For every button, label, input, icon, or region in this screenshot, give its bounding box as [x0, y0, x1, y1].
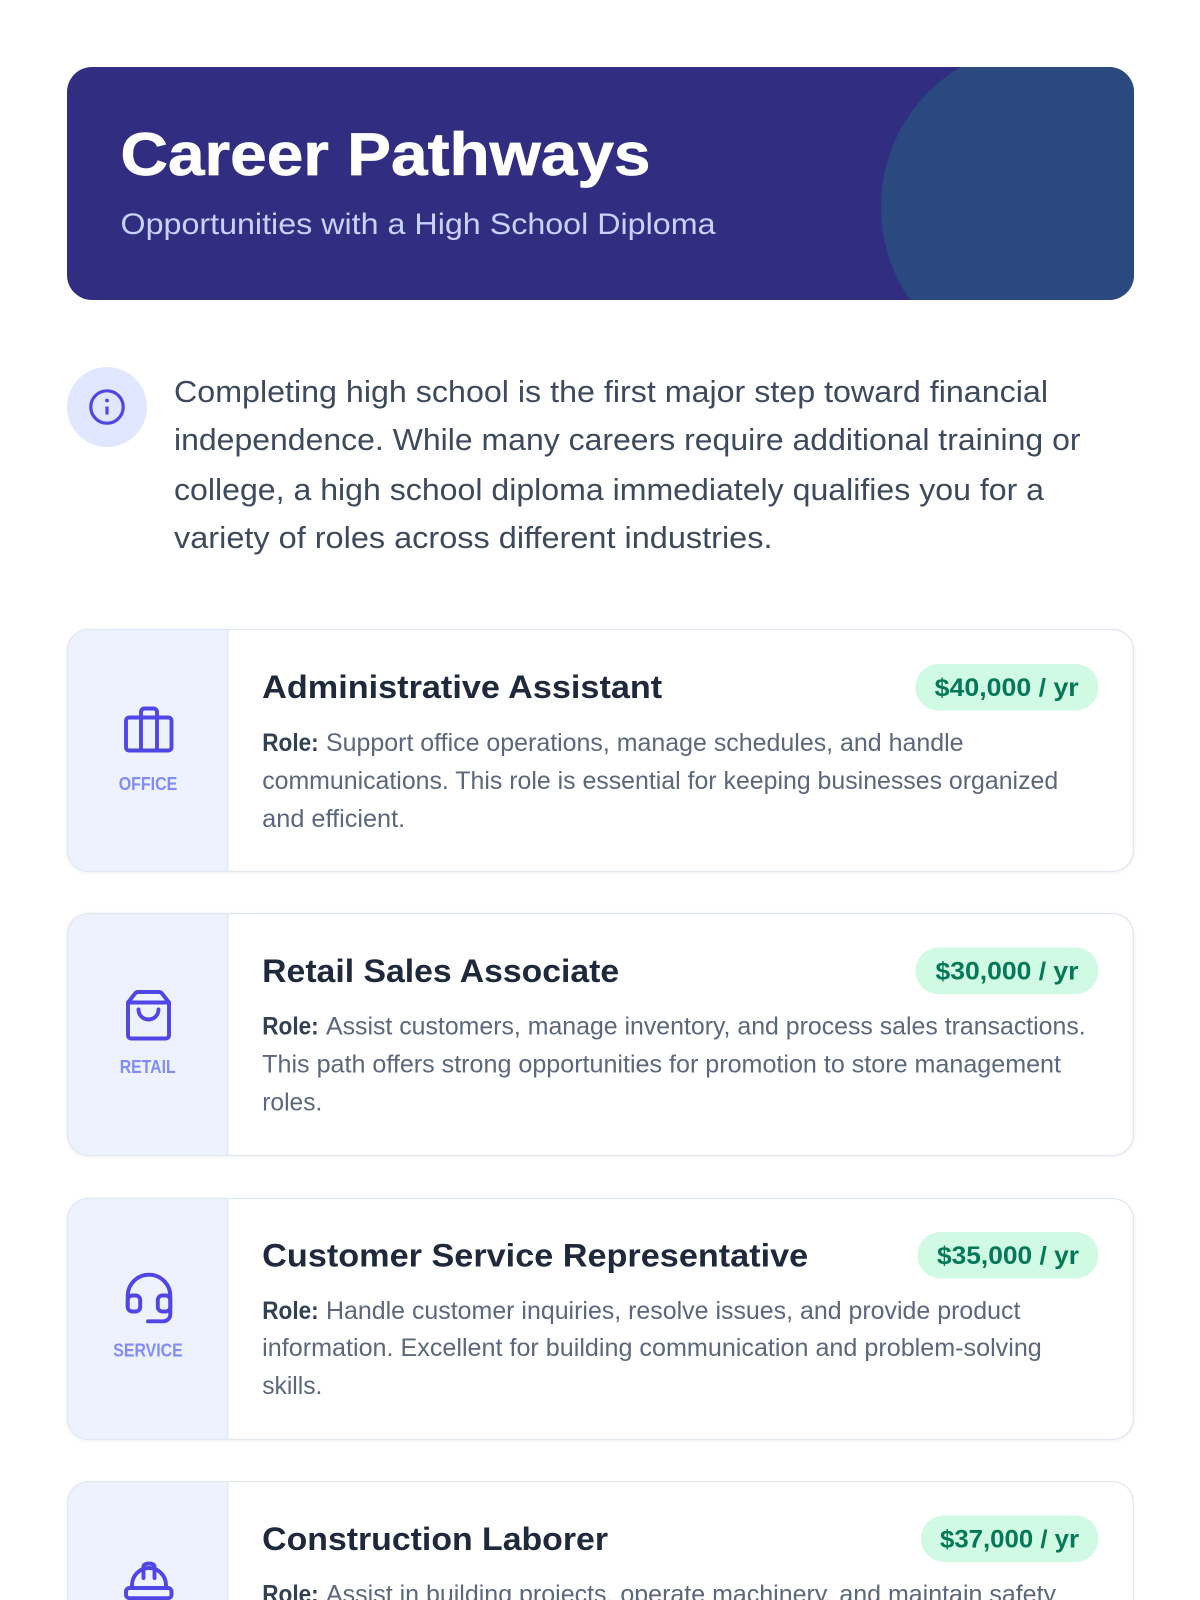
role description: This path offers strong opportunities for promotion to store management: [262, 1050, 1061, 1078]
icon: shopping bag: [128, 992, 169, 1038]
title: Career Pathways: [120, 121, 650, 188]
role description: skills.: [262, 1372, 322, 1400]
intro section: [67, 367, 1080, 555]
role description: Role:: [262, 1012, 319, 1040]
label: OFFICE: OFFICE: [119, 774, 177, 794]
role description: information. Excellent for building communication and problem-solving: [262, 1334, 1042, 1362]
sidebar: construction: [67, 1481, 228, 1600]
icon: info: [67, 367, 147, 447]
salary badge: [916, 948, 1098, 994]
salary badge: $35,000 / yr: [937, 1242, 1079, 1270]
panel: Retail Sales Associate card: [67, 913, 1134, 1156]
intro text: college, a high school diploma immediately qualifies you for a: [174, 472, 1045, 507]
intro text: [174, 374, 1080, 555]
icon: headset: [128, 1275, 170, 1321]
salary badge: [916, 664, 1098, 710]
role description: and efficient.: [262, 805, 405, 833]
salary badge: [921, 1516, 1098, 1562]
salary badge: $30,000 / yr: [936, 958, 1079, 986]
intro text: Completing high school is the first major step toward financial: [174, 374, 1048, 409]
role description: [262, 1012, 1086, 1116]
salary badge: $40,000 / yr: [935, 674, 1079, 702]
role description: communications. This role is essential for keeping businesses organized: [262, 767, 1058, 795]
label: SERVICE: SERVICE: [113, 1341, 183, 1361]
sidebar: service: [68, 1199, 228, 1439]
sidebar: retail: [68, 914, 228, 1155]
panel: Administrative Assistant card: [67, 629, 1134, 872]
icon: briefcase: [126, 708, 172, 750]
role description: [262, 1297, 1042, 1400]
job title: Retail Sales Associate: [262, 953, 619, 989]
salary badge: $37,000 / yr: [940, 1526, 1079, 1554]
job title: Customer Service Representative: [262, 1238, 808, 1274]
job title: Administrative Assistant: [262, 669, 663, 705]
role description: roles.: [262, 1088, 322, 1116]
job title: Construction Laborer: [262, 1521, 608, 1557]
panel: Construction Laborer card: [67, 1481, 1134, 1600]
role description: Role:: [262, 729, 319, 757]
icon: hard hat: [126, 1564, 172, 1598]
role description: Assist customers, manage inventory, and process sales transactions.: [326, 1012, 1086, 1040]
label: RETAIL: RETAIL: [120, 1057, 176, 1077]
decorative circle: [881, 67, 1134, 300]
intro text: variety of roles across different industries.: [174, 520, 772, 555]
salary badge: [918, 1232, 1098, 1278]
panel: header banner: [67, 67, 1134, 300]
subtitle: Opportunities with a High School Diploma: [120, 208, 716, 241]
intro text: independence. While many careers require additional training or: [174, 422, 1080, 457]
panel: Customer Service Representative card: [67, 1198, 1134, 1440]
role description: [262, 729, 1058, 833]
sidebar: office: [68, 630, 228, 871]
role description: Support office operations, manage schedules, and handle: [326, 729, 964, 757]
role description: Role:: [262, 1297, 319, 1325]
role description: Handle customer inquiries, resolve issues, and provide product: [326, 1297, 1020, 1325]
